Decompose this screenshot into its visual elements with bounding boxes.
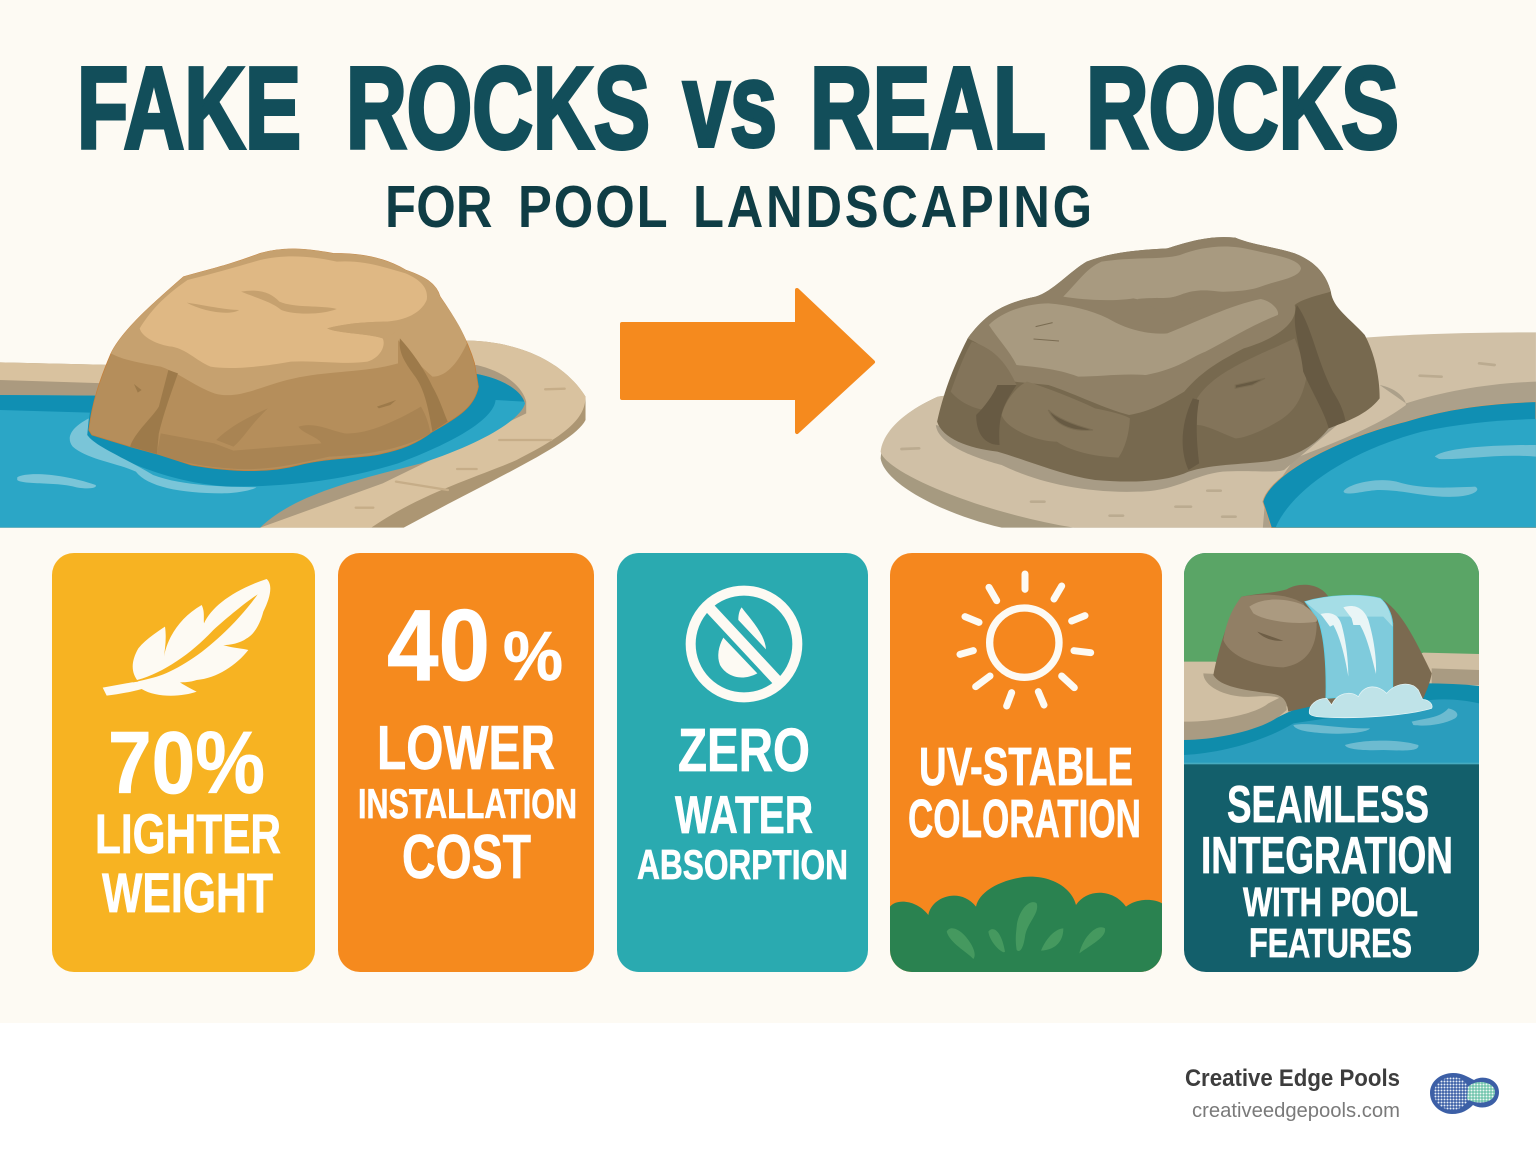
- title: ROCKS: [346, 43, 650, 173]
- title: vs: [683, 38, 777, 172]
- illustration: fake rock by pool: [0, 249, 586, 528]
- title: FAKE: [77, 43, 301, 173]
- panel: zero water absorption: [617, 553, 868, 972]
- panel: zero water absorption: WATER: [675, 786, 813, 845]
- subtitle: LANDSCAPING: [693, 173, 1092, 240]
- subtitle: POOL: [518, 173, 668, 240]
- footer: brand text: Creative Edge Pools: [1185, 1065, 1400, 1092]
- panel: seamless integration: FEATURES: [1249, 920, 1412, 966]
- arrow: [622, 290, 873, 432]
- panel: seamless integration: [1184, 553, 1479, 972]
- panel: zero water absorption: ABSORPTION: [637, 841, 848, 888]
- illustration: waterfall scene: [1184, 553, 1479, 764]
- panel: UV-stable coloration: UV-STABLE: [919, 737, 1133, 797]
- panel: 70% lighter weight: WEIGHT: [102, 861, 273, 924]
- subtitle: FOR: [385, 173, 492, 240]
- panel: 40% lower installation cost: INSTALLATION: [358, 780, 577, 827]
- panel: 40% lower installation cost: [338, 553, 594, 972]
- footer: logo: [1430, 1073, 1499, 1114]
- footer: brand text: [1185, 1065, 1400, 1122]
- panel: 70% lighter weight: [52, 553, 315, 972]
- illustration: real rock by pool: [881, 237, 1536, 528]
- icon: sun: [960, 574, 1091, 706]
- panel: 40% lower installation cost: COST: [402, 823, 531, 892]
- illustration: green bush: [890, 877, 1162, 975]
- footer: brand text: creativeedgepools.com: [1192, 1100, 1400, 1122]
- panel: seamless integration: SEAMLESS: [1227, 776, 1429, 834]
- title: [77, 38, 1399, 173]
- panel: 70% lighter weight: LIGHTER: [95, 802, 281, 865]
- title: ROCKS: [1086, 43, 1399, 173]
- icon: no water drop: [691, 591, 797, 697]
- icon: feather: [103, 579, 270, 696]
- panel: 70% lighter weight: 70%: [108, 713, 265, 812]
- panel: UV-stable coloration: [890, 553, 1162, 975]
- panel: seamless integration: WITH POOL: [1243, 879, 1418, 925]
- title: REAL: [810, 43, 1046, 173]
- panel: UV-stable coloration: COLORATION: [908, 789, 1141, 849]
- panel: 40% lower installation cost: 40: [387, 590, 490, 702]
- panel: zero water absorption: ZERO: [678, 716, 810, 784]
- subtitle: [385, 173, 1092, 240]
- panel: 40% lower installation cost: LOWER: [377, 714, 555, 783]
- panel: 40% lower installation cost: %: [503, 617, 563, 695]
